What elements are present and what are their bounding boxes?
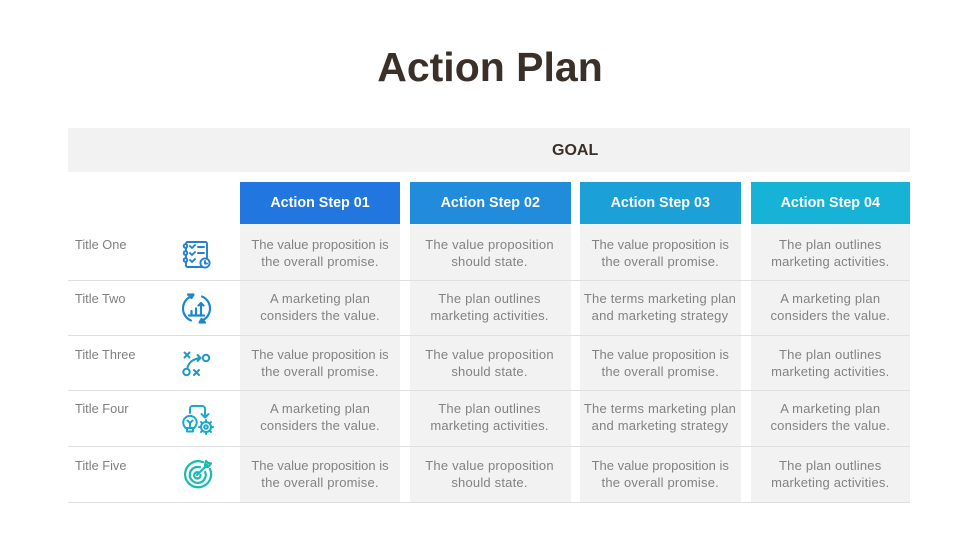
row text: row three step 04: The plan outlines (779, 347, 881, 362)
row text: row five step 04: marketing activities. (771, 474, 889, 490)
row text: row four step 01: A marketing plan (270, 401, 370, 416)
row text: row four step 02 (430, 401, 549, 432)
row text: row three step 01: The value proposition is (251, 347, 389, 362)
row text: row one step 03: The value proposition is (592, 237, 729, 252)
row text: row three step 02 (425, 347, 554, 378)
row text: row one step 04: marketing activities. (771, 254, 889, 268)
row text: row two step 03: and marketing strategy (592, 308, 728, 322)
row text: row one step 02: should state. (451, 254, 528, 268)
row text: row four step 01 (260, 401, 380, 432)
row text: row two step 02 (430, 291, 549, 322)
row label: title three: Title Three (75, 347, 135, 362)
row text: row five step 04 (771, 458, 889, 490)
row text: row two step 04: considers the value. (770, 308, 890, 322)
row text: row one step 03: the overall promise. (602, 254, 719, 268)
row text: row three step 03 (592, 347, 729, 378)
row label: title four: Title Four (75, 401, 129, 416)
row text: row four step 02: The plan outlines (438, 401, 541, 416)
row text: row one step 03 (592, 237, 729, 268)
header: action step 01 (240, 182, 400, 224)
icon: checklist with clock (182, 241, 211, 268)
row text: row three step 03: The value proposition is (592, 347, 729, 362)
row text: row five step 02 (425, 458, 554, 490)
icon: target with arrow (184, 460, 212, 488)
header: action step 03: Action Step 03 (611, 195, 710, 211)
row text: row two step 02: The plan outlines (438, 291, 541, 306)
header: action step 01: Action Step 01 (270, 195, 370, 211)
row text: row four step 04: A marketing plan (780, 401, 880, 416)
row text: row four step 03 (584, 401, 736, 432)
header: action step 02 (410, 182, 570, 224)
row text: row five step 02: The value proposition (425, 458, 554, 473)
row text: row three step 03: the overall promise. (602, 364, 719, 378)
row text: row one step 01: the overall promise. (261, 254, 379, 268)
row text: row five step 01 (251, 458, 389, 490)
row text: row three step 02: The value proposition (425, 347, 554, 362)
row text: row two step 03: The terms marketing plan (584, 291, 736, 306)
row text: row two step 01: A marketing plan (270, 291, 370, 306)
row text: row two step 01: considers the value. (260, 308, 380, 322)
icon: strategy play (182, 352, 210, 376)
row label: title five: Title Five (75, 458, 126, 473)
header: action step 04: Action Step 04 (781, 195, 880, 211)
header: action step 03 (580, 182, 740, 224)
row text: row five step 03: The value proposition is (592, 458, 729, 473)
column background 4 (750, 224, 910, 502)
header: action step 02: Action Step 02 (441, 195, 540, 211)
row text: row one step 02: The value proposition (425, 237, 554, 252)
row text: row four step 01: considers the value. (260, 418, 380, 432)
row text: row five step 03: the overall promise. (602, 474, 719, 490)
row text: row four step 04: considers the value. (770, 418, 890, 432)
column background 1 (240, 224, 400, 502)
icon: idea bulb and gear (182, 405, 214, 435)
row text: row four step 04 (770, 401, 890, 432)
row text: row five step 01: the overall promise. (261, 474, 379, 490)
row label: title one: Title One (75, 237, 126, 252)
goal banner: GOAL (552, 142, 598, 159)
row text: row two step 04 (770, 291, 890, 322)
row text: row three step 01 (251, 347, 389, 378)
row text: row two step 02: marketing activities. (430, 308, 549, 322)
row text: row four step 03: The terms marketing plan (584, 401, 736, 416)
title: Action Plan (377, 44, 603, 90)
row text: row five step 02: should state. (451, 474, 528, 490)
header: action step 04 (750, 182, 910, 224)
goal banner (68, 128, 910, 172)
row text: row two step 04: A marketing plan (780, 291, 880, 306)
column background 3 (580, 224, 740, 502)
row text: row four step 02: marketing activities. (430, 418, 549, 432)
row text: row three step 01: the overall promise. (261, 364, 379, 378)
column background 2 (410, 224, 570, 502)
row text: row one step 01 (251, 237, 389, 268)
row text: row one step 04: The plan outlines (779, 237, 881, 252)
row text: row three step 02: should state. (451, 364, 528, 378)
row text: row three step 04: marketing activities. (771, 364, 889, 378)
row text: row five step 04: The plan outlines (779, 458, 881, 473)
row text: row two step 03 (584, 291, 736, 322)
row text: row one step 01: The value proposition is (251, 237, 389, 252)
row text: row five step 03 (592, 458, 729, 490)
icon: growth cycle chart (182, 293, 212, 324)
row text: row four step 03: and marketing strategy (592, 418, 728, 432)
row text: row two step 01 (260, 291, 380, 322)
row text: row one step 04 (771, 237, 889, 268)
row text: row five step 01: The value proposition is (251, 458, 389, 473)
row text: row one step 02 (425, 237, 554, 268)
row label: title two: Title Two (75, 291, 126, 306)
row text: row three step 04 (771, 347, 889, 378)
